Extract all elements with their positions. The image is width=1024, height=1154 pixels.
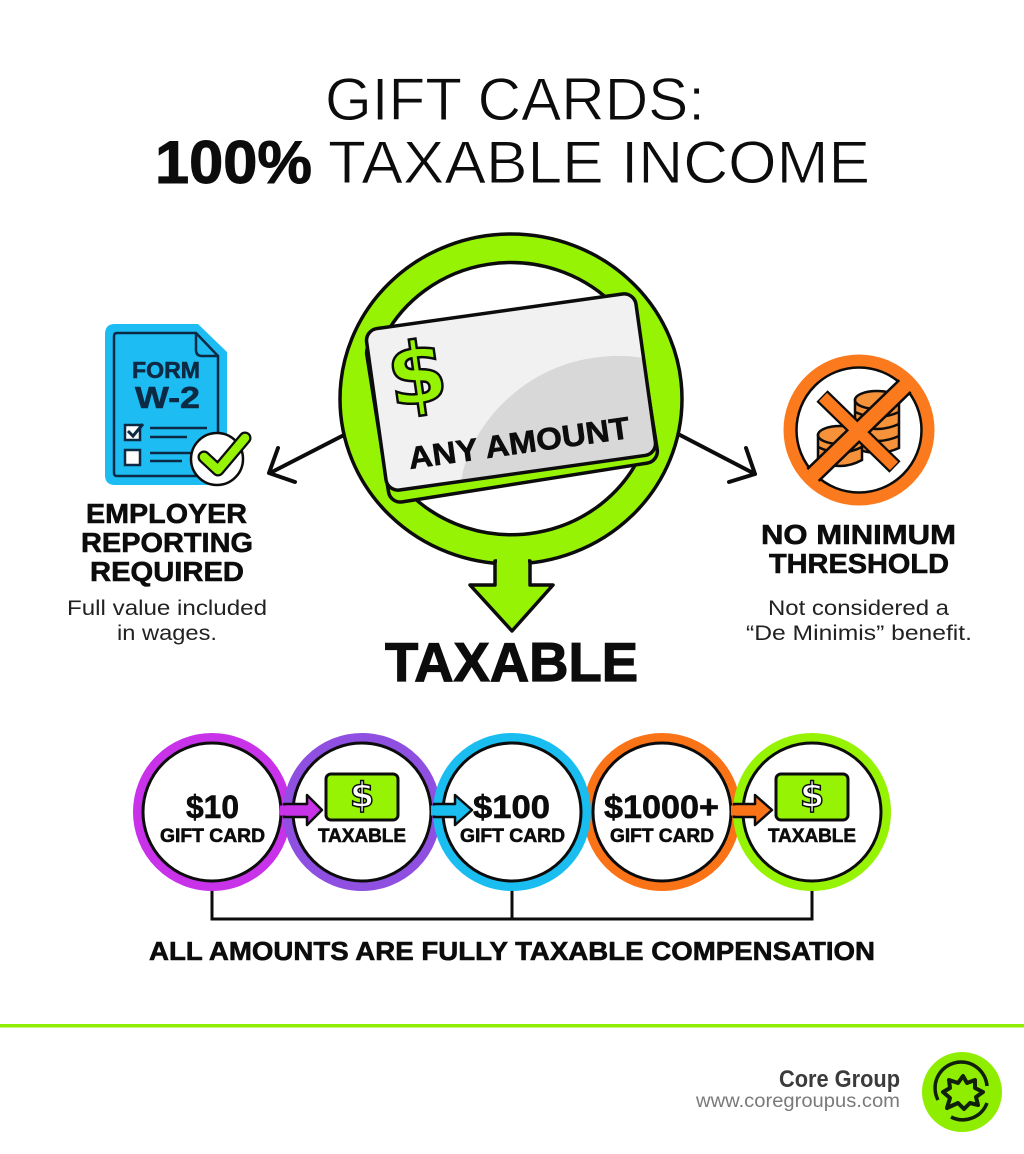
- ring: [340, 234, 682, 564]
- card face: [365, 292, 657, 492]
- ring: taxable purple: [288, 738, 436, 886]
- title: GIFT CARDS:: [325, 66, 705, 133]
- title: [155, 66, 870, 196]
- text block: no minimum threshold: [746, 519, 972, 645]
- inner outlines: [143, 743, 881, 881]
- amount chain: [138, 738, 886, 886]
- text block: no minimum threshold: THRESHOLD: [769, 548, 949, 579]
- step: $10 gift card: $10: [186, 789, 239, 825]
- step: taxable final: TAXABLE: [768, 826, 856, 847]
- text block: employer reporting: EMPLOYER: [86, 498, 247, 529]
- card dollar sign: $: [381, 322, 453, 428]
- step: $1000+ gift card: GIFT CARD: [610, 826, 714, 847]
- step: $100 gift card: [460, 789, 565, 847]
- bracket connector: [212, 885, 812, 919]
- ring: $1000+: [588, 738, 736, 886]
- text block: employer reporting: REPORTING: [81, 527, 253, 558]
- card text: ANY AMOUNT: [406, 410, 632, 476]
- arrow: to no minimum threshold: [680, 435, 755, 482]
- text block: employer reporting: [67, 498, 267, 645]
- text block: employer reporting: in wages.: [117, 622, 217, 645]
- arrow 2: [434, 795, 472, 825]
- ring: taxable green: [738, 738, 886, 886]
- step: taxable: [318, 774, 406, 847]
- title: TAXABLE INCOME: [328, 129, 870, 196]
- title: 100%: [155, 129, 312, 196]
- icon: W-2 form: FORM: [132, 357, 200, 383]
- text block: employer reporting: Full value included: [67, 597, 267, 620]
- icon: core group logo: [922, 1052, 1002, 1132]
- ring: $100: [438, 738, 586, 886]
- text block: no minimum threshold: NO MINIMUM: [761, 519, 956, 550]
- icon: W-2 form: [105, 324, 245, 485]
- icon: W-2 form: W-2: [135, 380, 200, 415]
- step: $10 gift card: [160, 789, 265, 847]
- text block: employer reporting: REQUIRED: [90, 556, 244, 587]
- heading: taxable: TAXABLE: [385, 631, 638, 693]
- ring opening above card: [385, 263, 610, 365]
- arrow: to employer reporting: [269, 435, 344, 482]
- footer brand text: [695, 1066, 900, 1112]
- caption: ALL AMOUNTS ARE FULLY TAXABLE COMPENSATION: [149, 936, 875, 966]
- step: $1000+ gift card: [604, 789, 719, 847]
- step: taxable final: $: [800, 776, 824, 816]
- step: taxable final: [768, 774, 856, 847]
- ring opening below card: [412, 430, 640, 535]
- arrow 1: [284, 795, 322, 825]
- arrow 3: [734, 795, 772, 825]
- step: $100 gift card: $100: [473, 789, 550, 825]
- ring: $10: [138, 738, 286, 886]
- footer divider: [0, 1024, 1024, 1028]
- text block: no minimum threshold: “De Minimis” benefit.: [746, 622, 972, 645]
- step: $10 gift card: GIFT CARD: [160, 826, 265, 847]
- footer brand text: www.coregroupus.com: [695, 1091, 900, 1112]
- step: taxable: TAXABLE: [318, 826, 406, 847]
- text block: no minimum threshold: Not considered a: [768, 597, 949, 620]
- central gift card icon with ring: [340, 234, 682, 631]
- icon: no coins: [790, 361, 928, 499]
- step: $100 gift card: GIFT CARD: [460, 826, 565, 847]
- step: taxable: $: [350, 776, 374, 816]
- footer brand text: Core Group: [779, 1066, 900, 1093]
- down arrow: [470, 561, 553, 631]
- card back layer: [365, 300, 659, 504]
- step: $1000+ gift card: $1000+: [604, 789, 719, 825]
